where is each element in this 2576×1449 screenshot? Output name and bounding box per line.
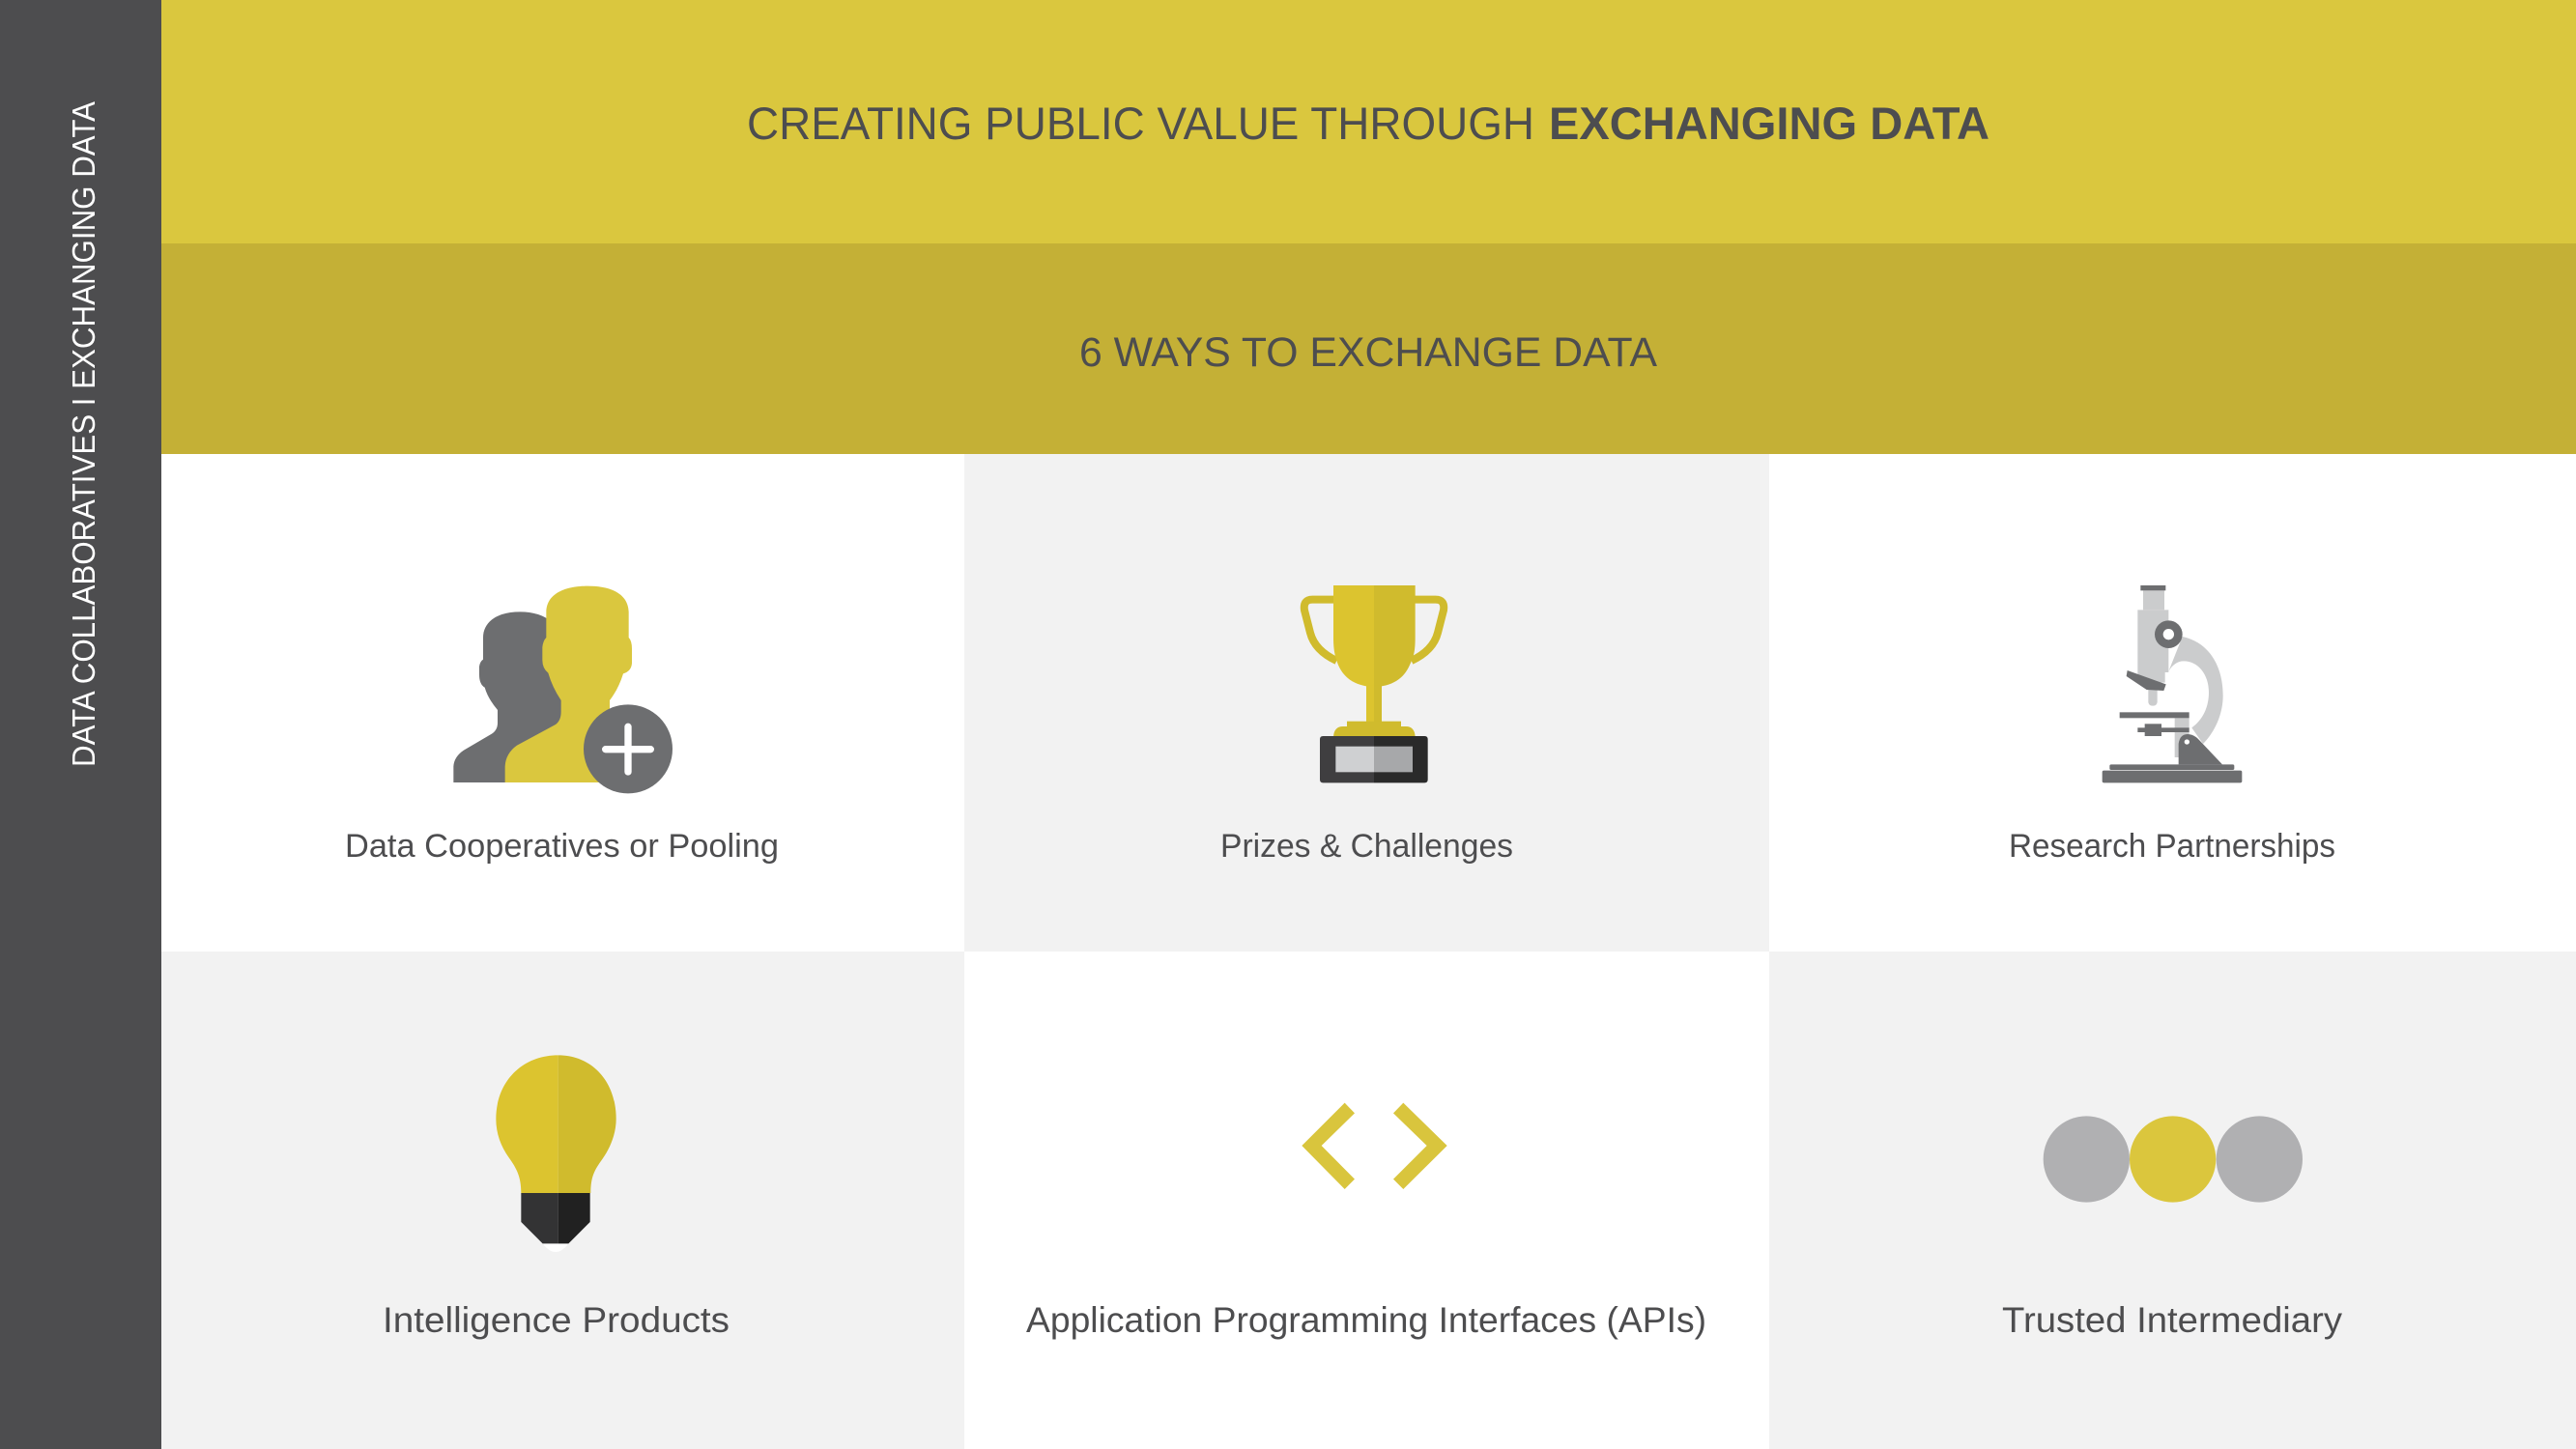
title: EXCHANGING DATA	[1549, 98, 1989, 149]
title: CREATING PUBLIC VALUE THROUGH	[747, 98, 1534, 149]
panel: intelligence cell	[161, 952, 964, 1449]
label: research partnerships: Research Partnerships	[2009, 828, 2335, 865]
label: trusted intermediary: Trusted Intermediary	[2002, 1300, 2343, 1340]
label: data cooperatives: Data Cooperatives or Pooling	[345, 828, 779, 865]
icon: trophy	[1304, 585, 1444, 782]
label: prizes: Prizes & Challenges	[1220, 828, 1513, 865]
icon: microscope	[2103, 585, 2242, 782]
panel: prizes cell	[964, 454, 1769, 952]
subtitle: 6 WAYS TO EXCHANGE DATA	[1079, 329, 1657, 376]
label: APIs: Application Programming Interfaces (APIs)	[1026, 1300, 1706, 1340]
sidebar: DATA COLLABORATIVES I EXCHANGING DATA	[66, 101, 101, 767]
sidebar	[0, 0, 161, 1449]
icon: light bulb	[496, 1055, 616, 1252]
icon: three circles	[2044, 1116, 2303, 1203]
panel: intermediary cell	[1769, 952, 2576, 1449]
panel: subtitle banner	[161, 243, 2576, 454]
icon: data cooperatives people	[453, 586, 673, 793]
icon: code brackets	[1302, 1103, 1447, 1189]
label: intelligence products: Intelligence Products	[383, 1300, 730, 1340]
title	[747, 98, 1989, 149]
panel: top banner	[161, 0, 2576, 243]
